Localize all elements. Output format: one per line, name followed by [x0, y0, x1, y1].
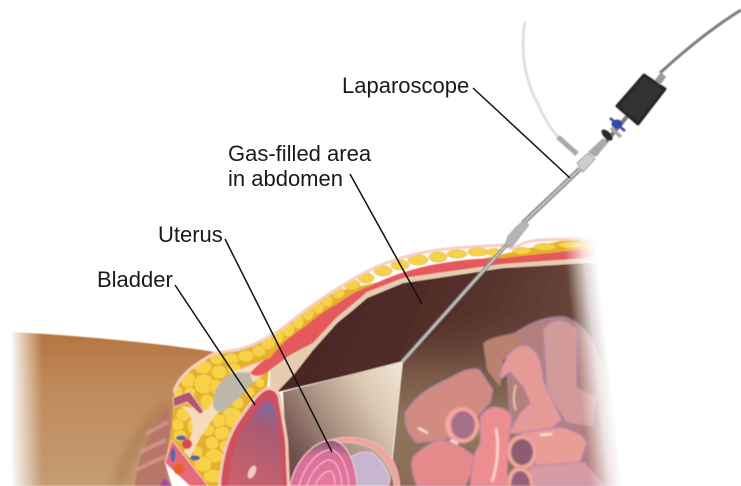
pubic bone [213, 372, 253, 412]
camera cable collar [655, 72, 666, 85]
peritoneal cavity: gas-filled area [277, 262, 625, 486]
cream ligament [180, 358, 270, 458]
blue coupler [610, 118, 625, 131]
bowel lumen 1 [442, 404, 482, 446]
right bowel loop [520, 427, 587, 467]
fallopian tube [330, 437, 400, 486]
far mauve loop [505, 317, 625, 486]
subcutaneous fat layer [165, 230, 610, 486]
label: Gas-filled area in abdomen [228, 141, 422, 304]
bowel lumen 2 [504, 433, 540, 471]
uterus body [290, 440, 357, 486]
S-shaped vertical loop [470, 407, 512, 486]
camera head [617, 75, 665, 124]
scope body [588, 138, 608, 157]
deep abdominal background [390, 262, 625, 486]
right side fade [555, 225, 741, 486]
uterus and ovary [290, 437, 400, 486]
scope center rod [595, 113, 630, 155]
collar [577, 153, 595, 172]
label: Gas-filled area in abdomen: in abdomen [228, 166, 343, 191]
skin and thigh [0, 325, 215, 486]
pale upper loop [483, 333, 523, 387]
bladder [218, 387, 290, 486]
label: Uterus [158, 222, 332, 452]
pubic tissue and vessels [160, 392, 208, 486]
label: Laparoscope: Laparoscope [342, 73, 469, 98]
pale lower loop [525, 462, 605, 486]
label: Laparoscope [342, 73, 570, 178]
muscle layer [250, 247, 605, 376]
label: Bladder [97, 267, 255, 405]
label: Bladder: Bladder [97, 267, 173, 292]
focus ring [600, 128, 621, 142]
peritoneum lining [270, 258, 605, 392]
ovary [350, 452, 390, 486]
light cone from scope [283, 361, 403, 486]
thin white tube [523, 22, 558, 137]
label: Uterus: Uterus [158, 222, 223, 247]
left large loop [405, 369, 493, 443]
trocar sleeve [505, 169, 580, 247]
uterine muscle rings [299, 450, 349, 486]
laparoscope [402, 10, 741, 362]
pink skin edge [174, 238, 605, 392]
small intestine loops [405, 317, 625, 486]
long vertical loop [543, 320, 597, 427]
label: Gas-filled area in abdomen: Gas-filled area [228, 141, 372, 166]
cable [660, 10, 741, 73]
lower left loop [412, 440, 475, 486]
central arch loop [500, 345, 562, 434]
scope shaft [402, 241, 510, 362]
tube connector [558, 137, 577, 154]
bowel lumen 3 [507, 467, 534, 486]
